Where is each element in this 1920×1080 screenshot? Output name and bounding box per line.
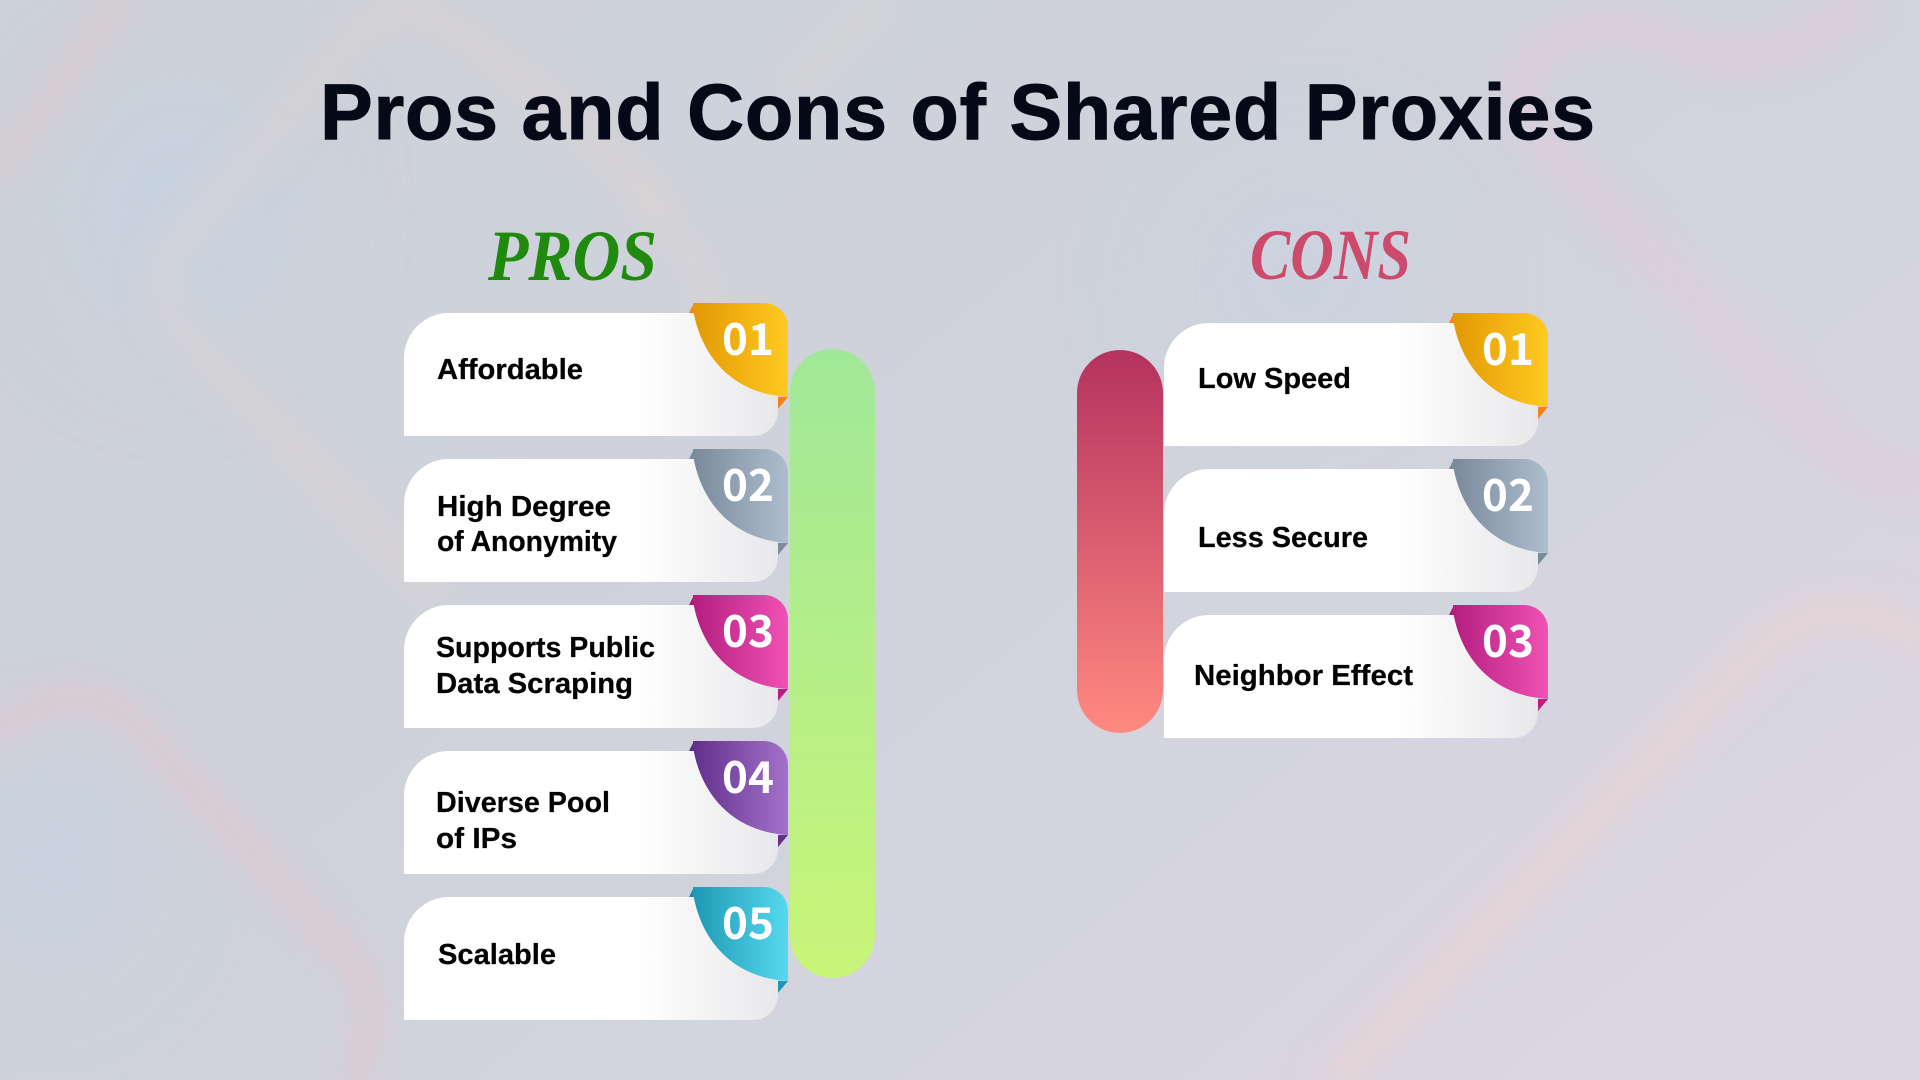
con card 1: Low Speed bbox=[1164, 313, 1548, 446]
pro card 4: Diverse Pool of IPs bbox=[404, 741, 788, 874]
con card 2: Less Secure: 02 bbox=[1482, 460, 1534, 524]
con card 2: Less Secure bbox=[1164, 459, 1548, 592]
pro card 4: Diverse Pool of IPs: of IPs bbox=[436, 823, 517, 855]
pro card 3: Supports Public Data Scraping: 03 bbox=[722, 596, 774, 660]
con card 1: Low Speed: Low Speed bbox=[1198, 363, 1351, 395]
pro card 1: Affordable: Affordable bbox=[437, 354, 583, 386]
pro card 2: High Degree of Anonymity: High Degree bbox=[437, 491, 611, 523]
con card 3: Neighbor Effect bbox=[1164, 605, 1548, 738]
heading: cons: CONS bbox=[1250, 215, 1411, 295]
pro card 4: Diverse Pool of IPs: Diverse Pool bbox=[436, 787, 610, 819]
title: Pros and Cons of Shared Proxies bbox=[320, 67, 1595, 156]
pro card 2: High Degree of Anonymity bbox=[404, 449, 788, 582]
con card 3: Neighbor Effect: 03 bbox=[1482, 606, 1534, 670]
pro card 1: Affordable bbox=[404, 303, 788, 436]
pro card 5: Scalable: 05 bbox=[722, 888, 774, 952]
pro card 4: Diverse Pool of IPs: 04 bbox=[722, 742, 774, 806]
con card 3: Neighbor Effect: Neighbor Effect bbox=[1194, 660, 1413, 692]
pro card 1: Affordable: 01 bbox=[722, 304, 774, 368]
con card 2: Less Secure: Less Secure bbox=[1198, 522, 1368, 554]
pro card 3: Supports Public Data Scraping bbox=[404, 595, 788, 728]
pros vertical bar bbox=[790, 349, 875, 978]
pro card 5: Scalable bbox=[404, 887, 788, 1020]
con card 1: Low Speed: 01 bbox=[1482, 314, 1534, 378]
pro card 2: High Degree of Anonymity: 02 bbox=[722, 450, 774, 514]
pro card 2: High Degree of Anonymity: of Anonymity bbox=[437, 526, 617, 558]
pro card 3: Supports Public Data Scraping: Data Scraping bbox=[436, 668, 633, 700]
pro card 5: Scalable: Scalable bbox=[438, 939, 556, 971]
heading: pros: PROS bbox=[487, 216, 657, 296]
pro card 3: Supports Public Data Scraping: Supports Public bbox=[436, 632, 655, 664]
cons vertical bar bbox=[1077, 350, 1163, 733]
